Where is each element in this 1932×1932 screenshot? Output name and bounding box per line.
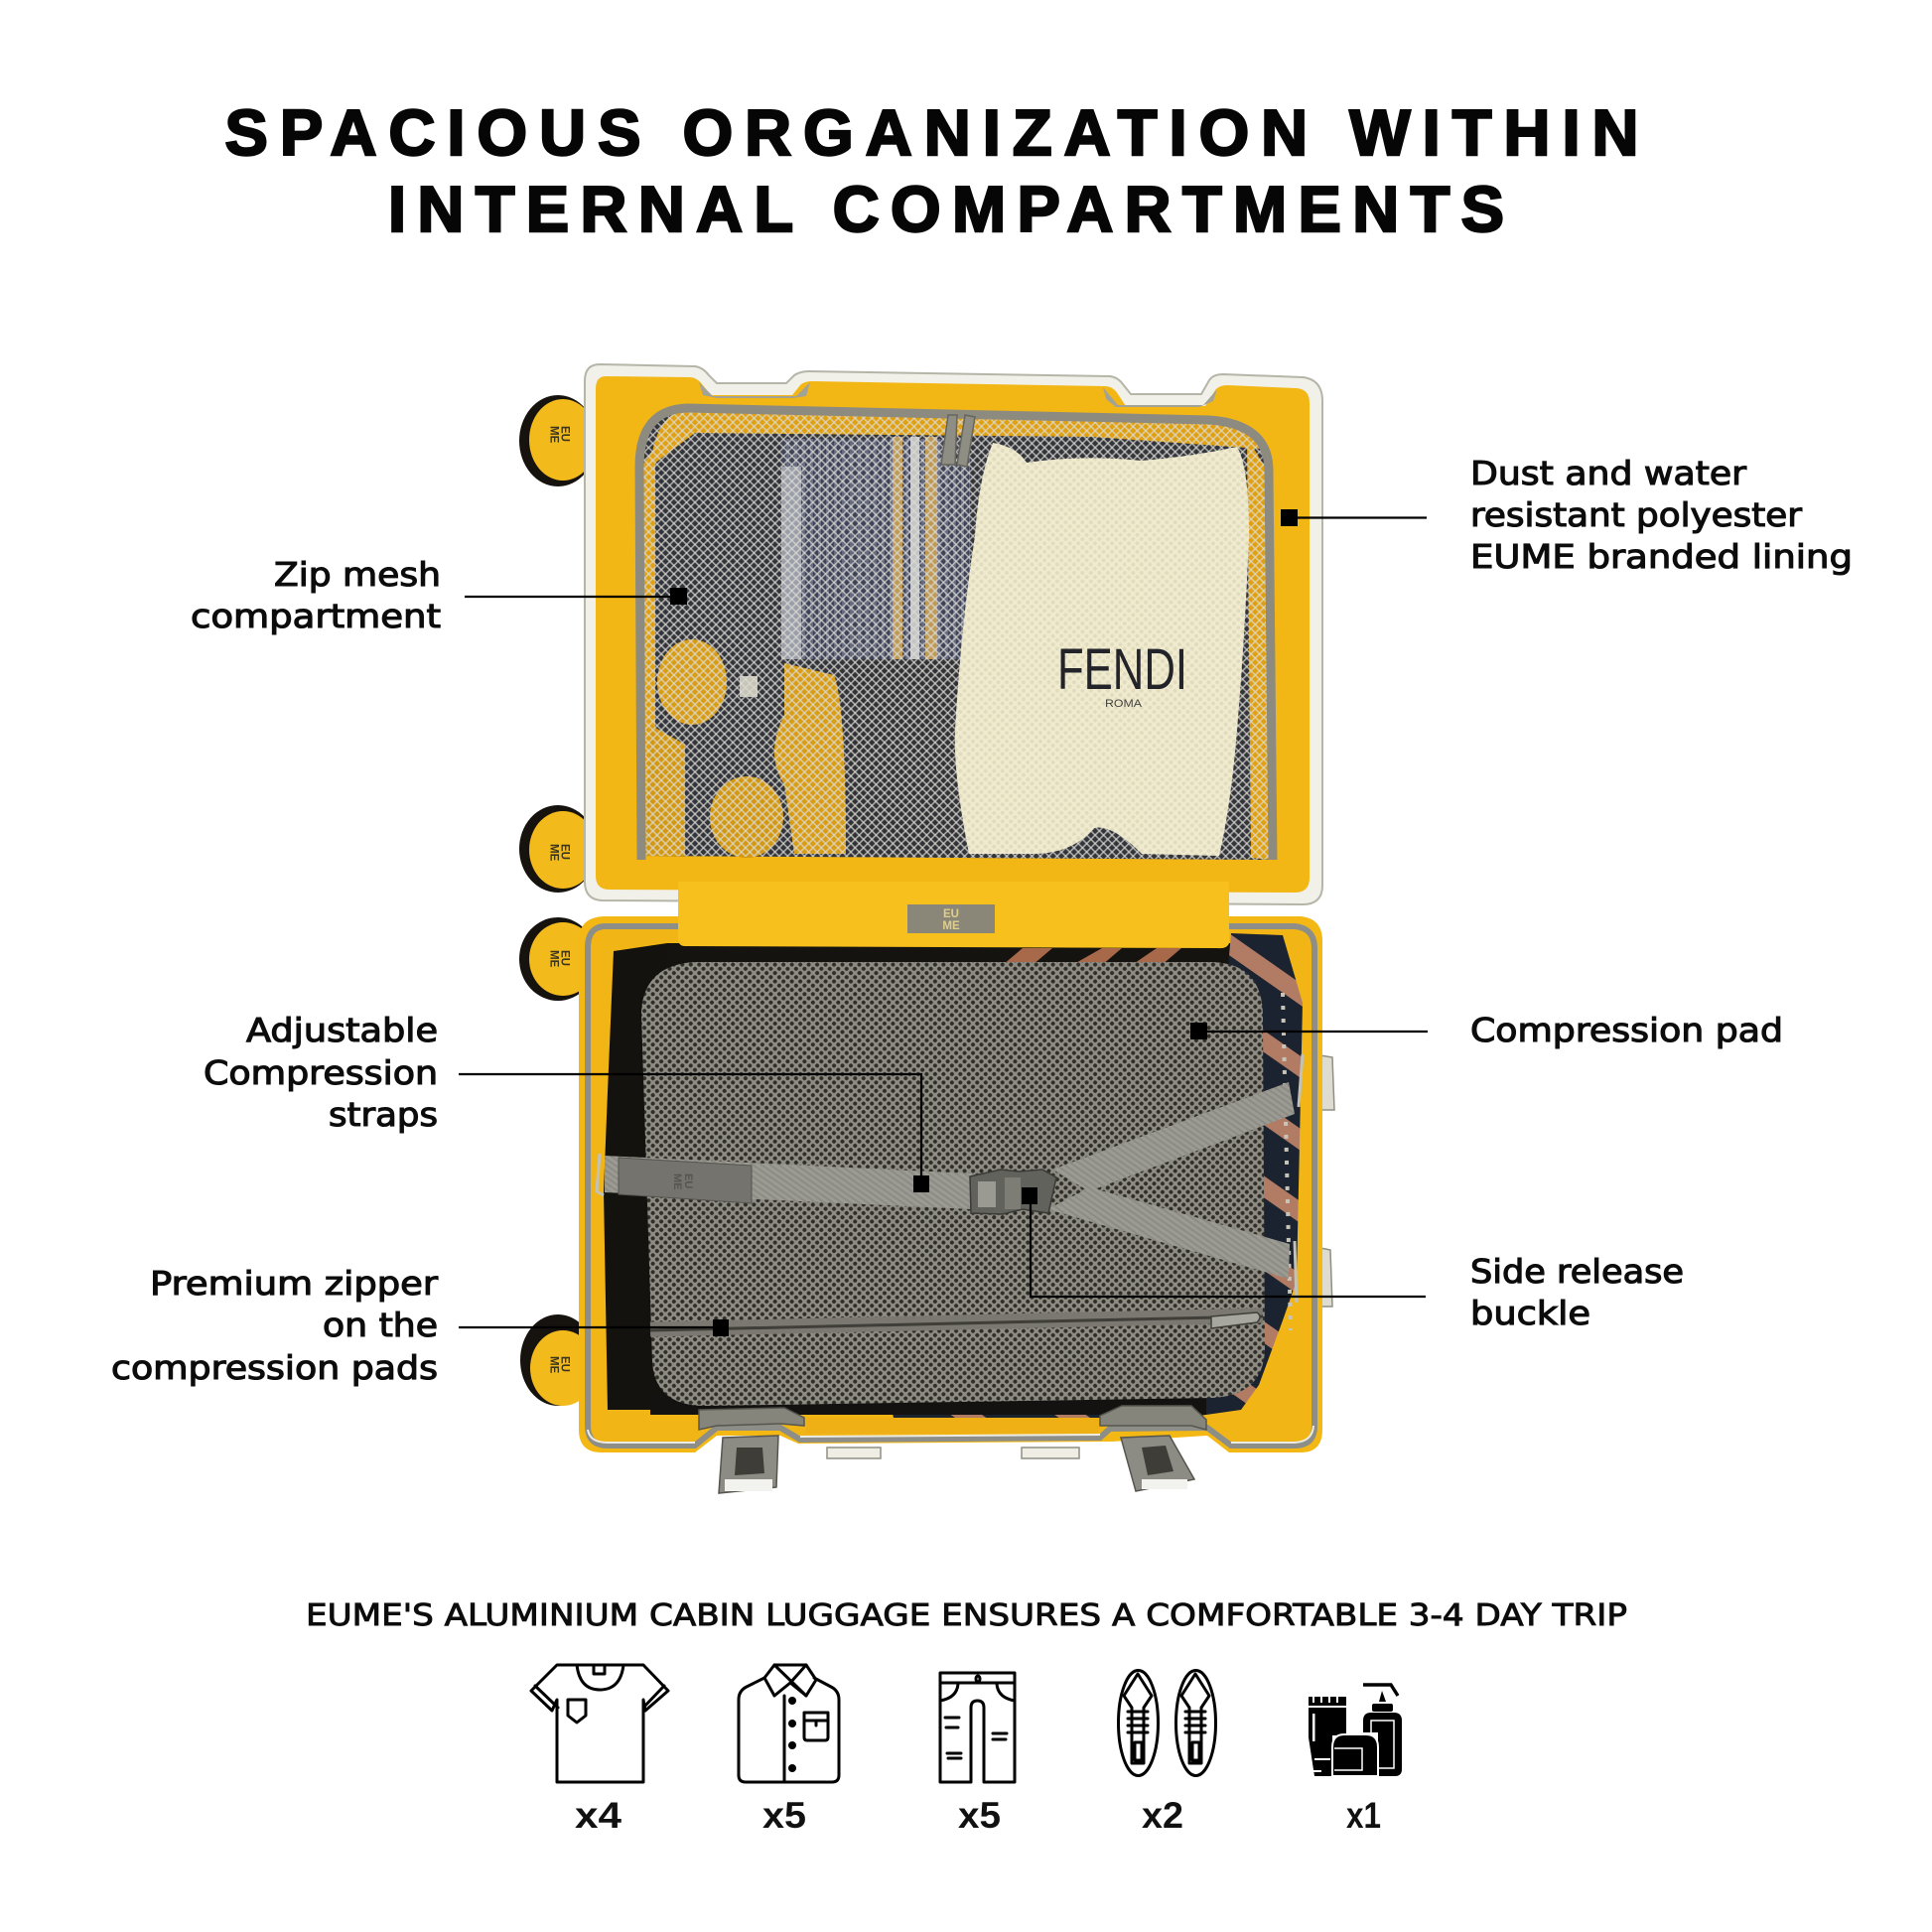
- callout: dust and water resistant lining: [1281, 455, 1853, 576]
- cream dust bag: [955, 443, 1249, 856]
- clothing: patterned right side: [890, 933, 1303, 1420]
- pad under-shadow: [650, 1395, 1206, 1415]
- callout: adjustable compression straps: Compression: [204, 1054, 438, 1092]
- compression strap: lower diagonal: [1047, 1187, 1290, 1279]
- callout: side release buckle: buckle: [1470, 1295, 1590, 1332]
- light strap: [781, 467, 801, 659]
- latch: bottom left: [719, 1436, 778, 1493]
- yellow lining at mesh sides: [640, 437, 1271, 860]
- yellow pouch: [657, 639, 727, 725]
- wheel: lower shell bottom: [520, 1314, 596, 1406]
- wheel: upper lid bottom: ME: [548, 844, 560, 862]
- icon: shoes x2: [1118, 1670, 1215, 1836]
- clothing: black left side: [604, 943, 695, 1410]
- wheel: upper lid top: ME: [548, 426, 560, 444]
- callout: compression pad: Compression pad: [1470, 1012, 1783, 1049]
- zipper pulls: [941, 415, 975, 467]
- leather strap end: [619, 1158, 752, 1203]
- yellow lining: [596, 376, 1310, 893]
- pad zipper: [650, 1312, 1263, 1330]
- icon: shirt x5: x5: [762, 1795, 806, 1836]
- wheel: lower shell top: ME: [548, 950, 560, 968]
- callout: premium zipper: [111, 1265, 729, 1387]
- side strap anchors: [597, 1054, 1303, 1303]
- small metal tag: [740, 676, 758, 697]
- frame highlight: [588, 1426, 1313, 1443]
- callout: zip mesh compartment: [191, 556, 687, 635]
- icon: toiletries x1: x1: [1346, 1795, 1381, 1836]
- wheel: lower shell bottom: EU: [558, 1356, 570, 1372]
- callout: adjustable compression straps: straps: [329, 1096, 438, 1134]
- clothing: top strip: [655, 943, 1271, 993]
- icon: t-shirt x4: [531, 1665, 668, 1836]
- brand tag: [907, 904, 995, 933]
- lower shell: [579, 916, 1322, 1493]
- FENDI print: FENDI: [1057, 637, 1187, 702]
- side release buckle: [970, 1170, 1056, 1214]
- yellow body: [579, 916, 1322, 1452]
- title: [224, 96, 1638, 245]
- brand tag: ME: [942, 920, 960, 932]
- upper lid shell: [585, 364, 1322, 904]
- striped clothing: [781, 439, 970, 659]
- callout: dust and water resistant lining: resistant polyester: [1470, 496, 1803, 534]
- wheel: lower shell top: EU: [558, 950, 570, 966]
- aluminium frame: [585, 364, 1322, 904]
- callout: adjustable compression straps: Adjustable: [246, 1012, 438, 1049]
- wheel: upper lid top: EU: [558, 426, 570, 442]
- dark lower clothing: [850, 659, 959, 854]
- embossed logo: EU: [682, 1173, 694, 1188]
- zipper tape: [639, 408, 1273, 860]
- latch recess: left: [699, 382, 810, 398]
- icon: trousers x5: [940, 1673, 1015, 1836]
- aluminium inner frame: [588, 926, 1314, 1446]
- wheel: lower shell bottom: ME: [548, 1356, 560, 1374]
- title: SPACIOUS ORGANIZATION WITHIN: [224, 96, 1638, 169]
- right side latches: [1320, 1055, 1334, 1307]
- clothing: top strip pattern: [1003, 948, 1181, 965]
- callout: adjustable compression straps: [204, 1012, 929, 1192]
- icon: toiletries x1: [1309, 1685, 1402, 1836]
- latch: bottom right: [1121, 1436, 1194, 1491]
- callout: side release buckle: Side release: [1470, 1253, 1684, 1291]
- icon: shirt x5: [739, 1665, 839, 1836]
- yellow fabric: [774, 663, 846, 854]
- clothing: dotted trim: [1283, 993, 1291, 1330]
- title: INTERNAL COMPARTMENTS: [388, 173, 1504, 245]
- compression pad: [641, 962, 1265, 1406]
- small latch tabs: [827, 1448, 1079, 1458]
- yellow lining bottom: [806, 1418, 1104, 1434]
- callout: premium zipper: on the: [323, 1307, 438, 1344]
- wheel: lower shell top: [519, 917, 597, 1001]
- callout: premium zipper: Premium zipper: [150, 1265, 439, 1303]
- callout: dust and water resistant lining: Dust and water: [1470, 455, 1747, 492]
- latch recess: right: [1103, 387, 1217, 407]
- icon: shoes x2: x2: [1142, 1795, 1183, 1836]
- icon: t-shirt x4: x4: [575, 1795, 621, 1836]
- compression strap: upper diagonal: [1052, 1082, 1295, 1191]
- hinge flap: [678, 882, 1229, 948]
- callout: compression pad: [1190, 1012, 1783, 1049]
- yellow band seen through mesh: [650, 409, 1261, 467]
- ROMA print: ROMA: [1105, 698, 1143, 710]
- callout: dust and water resistant lining: EUME branded lining: [1470, 538, 1853, 576]
- zip mesh compartment: [639, 408, 1273, 860]
- callout: side release buckle: [1022, 1187, 1684, 1332]
- embossed logo: ME: [671, 1173, 683, 1189]
- callout: zip mesh compartment: Zip mesh: [274, 556, 441, 594]
- wheel: upper lid bottom: [519, 805, 597, 893]
- callout: premium zipper: compression pads: [111, 1349, 438, 1387]
- mesh overlay: [640, 409, 1271, 860]
- packing capacity heading: EUME'S ALUMINIUM CABIN LUGGAGE ENSURES A COMFORTABLE 3-4 DAY TRIP: [306, 1598, 1627, 1633]
- suitcase photograph: [519, 364, 1334, 1493]
- embossed logo: [671, 1173, 694, 1189]
- brand tag: EU: [943, 908, 959, 920]
- interior latch blocks: [699, 1406, 1206, 1430]
- yellow circle: [710, 776, 783, 858]
- yellow left edge: [645, 725, 685, 856]
- compression strap: horizontal: [605, 1156, 972, 1209]
- tan stripes: [893, 437, 937, 659]
- icon: trousers x5: x5: [958, 1795, 1001, 1836]
- callout: zip mesh compartment: compartment: [191, 598, 441, 635]
- wheel: upper lid top: [519, 395, 597, 486]
- wheel: upper lid bottom: EU: [558, 844, 570, 860]
